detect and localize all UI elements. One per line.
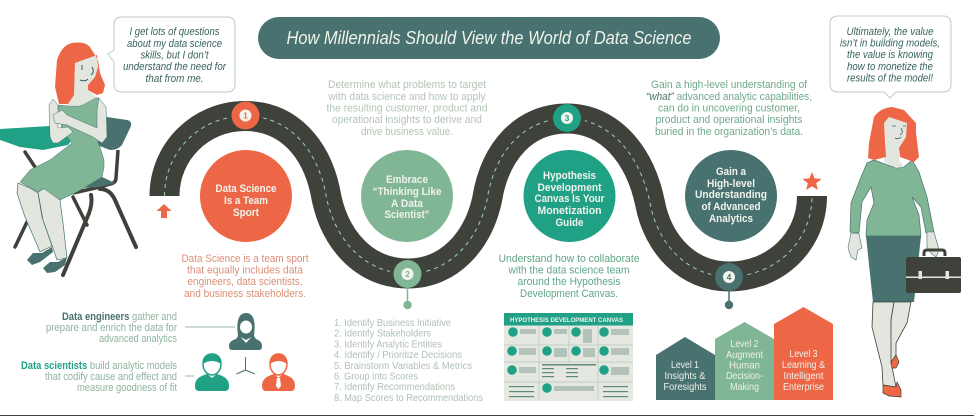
text: data engineers: prepare and enrich the data for	[46, 322, 177, 334]
text: understand how to collaborate: around the Hypothesis	[518, 276, 621, 288]
shoes	[27, 247, 67, 273]
circle: data science is a team sport	[200, 150, 292, 242]
text: gain a high-level understanding: “what” advanced analytic capabilities,	[646, 91, 812, 103]
text: data engineers: advanced analytics	[99, 333, 177, 345]
speech bubble: right: isn’t in building models,	[840, 38, 940, 50]
level 2 block: Decision-	[726, 370, 763, 382]
finish star	[802, 172, 822, 190]
numbered list of steps: 7. Identify Recommendations	[334, 381, 455, 393]
start arrow	[156, 204, 172, 218]
circle: data science is a team sport: Sport	[233, 207, 259, 219]
text: data scientists: measure goodness of fit	[77, 382, 177, 394]
circle: embrace thinking like a data scientist: Scientist”	[384, 209, 430, 221]
circle: hypothesis development canvas: Guide	[556, 217, 584, 229]
right figure: woman with briefcase	[848, 107, 961, 397]
circle: gain a high-level understanding: Gain a	[716, 166, 747, 178]
numbered list of steps: 8. Map Scores to Recommendations	[334, 392, 483, 404]
neck and face	[62, 55, 98, 105]
numbered list of steps: 3. Identify Analytic Entities	[334, 338, 442, 350]
text: gain a high-level understanding: can do in uncovering customer,	[658, 102, 800, 114]
numbered list of steps: 2. Identify Stakeholders	[334, 328, 431, 340]
level 2 block: Making	[730, 381, 759, 393]
speech bubble: right: the value is knowing	[847, 49, 934, 61]
speech bubble: left: I get lots of questions	[130, 26, 220, 38]
circle: gain a high-level understanding: Understanding	[695, 189, 767, 201]
hair	[55, 42, 105, 104]
text: data engineers	[46, 311, 177, 345]
circle: data science is a team sport: Is a Team	[224, 195, 268, 207]
text: gain a high-level understanding: buried in the organization’s data.	[655, 126, 803, 138]
icon: data scientist	[195, 354, 229, 391]
level 2 block: Human	[729, 360, 760, 372]
team icons	[185, 313, 295, 391]
text: gain a high-level understanding: Gain a high-level understanding of	[651, 79, 808, 91]
level 1 block: Level 1	[671, 359, 699, 371]
icon: business stakeholder	[262, 354, 295, 391]
text: determine what problems	[326, 79, 488, 138]
level 3 block: Level 3	[790, 348, 818, 360]
step marker 4: 4	[727, 272, 732, 282]
hands	[848, 232, 939, 260]
step marker 4	[715, 263, 743, 309]
text: determine what problems: operational insights to derive and	[332, 114, 482, 126]
speech bubble: left	[108, 17, 235, 92]
level 1 block: Insights &	[664, 370, 706, 382]
circle: hypothesis development canvas	[524, 150, 616, 242]
hair	[868, 107, 919, 162]
text: team sport description: Data Science is a team sport	[182, 253, 308, 265]
level 1 block: Foresights	[664, 381, 706, 393]
chair	[15, 117, 136, 275]
numbered list of steps: 4. Identify / Prioritize Decisions	[334, 349, 462, 361]
icon: data engineer	[229, 313, 262, 350]
speech bubble: left: about my data science	[127, 38, 222, 50]
text: understand how to collaborate: with the data science team	[508, 264, 630, 276]
circle: hypothesis development canvas: Development	[538, 182, 602, 194]
legs	[872, 302, 911, 387]
circle: embrace thinking like a data scientist: Embrace	[386, 174, 428, 186]
circle: embrace thinking like a data scientist: A Data	[391, 198, 424, 210]
numbered list of steps	[334, 317, 483, 404]
hypothesis development canvas thumbnail	[504, 313, 633, 401]
circle: hypothesis development canvas: Monetization	[538, 205, 602, 217]
text: determine what problems: Determine what problems to target	[328, 79, 486, 91]
sweater	[850, 160, 934, 236]
shoes	[883, 355, 901, 397]
briefcase	[906, 250, 961, 293]
icon: connector	[236, 357, 255, 374]
text: understand how to collaborate: Development Canvas.	[520, 288, 618, 300]
speech bubble: right: how to monetize the	[847, 61, 933, 73]
title banner: How Millennials Should View the World of Data Science	[286, 27, 692, 48]
numbered list of steps: 1. Identify Business Initiative	[334, 317, 451, 329]
bottom rule	[0, 415, 974, 416]
left figure: woman seated at desk	[0, 42, 136, 275]
text: data scientists: Data scientists build analytic models	[21, 360, 177, 372]
title banner	[258, 17, 720, 59]
circle: data science is a team sport: Data Science	[216, 183, 276, 195]
step marker 2: 2	[405, 269, 410, 279]
text: understand how to collaborate	[498, 253, 640, 300]
circle: gain a high-level understanding: High-level	[707, 178, 755, 190]
numbered list of steps: 5. Brainstorm Variables & Metrics	[334, 360, 472, 372]
text: data scientists: that codify cause and effect and	[45, 371, 177, 383]
step marker 3	[553, 104, 581, 132]
circle: embrace thinking like a data scientist: “Thinking Like	[372, 186, 442, 198]
skirt dots	[866, 236, 921, 302]
legs	[17, 183, 67, 260]
circle: gain a high-level understanding	[685, 150, 777, 242]
numbered list of steps: 6. Group into Scores	[334, 370, 418, 382]
speech bubble: left: skills, but I don’t	[140, 50, 209, 62]
circle: embrace thinking like a data scientist	[361, 150, 453, 242]
circle: hypothesis development canvas: Canvas Is Your	[534, 193, 605, 205]
circle: hypothesis development canvas: Hypothesis	[543, 170, 596, 182]
desk	[0, 126, 72, 150]
level 2 block	[715, 322, 774, 400]
step marker 1: 1	[243, 110, 248, 120]
facial features	[892, 126, 906, 139]
speech bubble: left: understand the need for	[123, 61, 227, 73]
circle: gain a high-level understanding: of Advanced	[702, 201, 760, 213]
text: gain a high-level understanding	[646, 79, 812, 138]
text: team sport description	[182, 253, 308, 300]
speech bubble: right	[830, 16, 951, 98]
level 3 block	[774, 307, 833, 400]
facial features	[80, 65, 93, 81]
text: understand how to collaborate: Understand how to collaborate	[498, 253, 640, 265]
level 3 block: Intelligent	[784, 370, 824, 382]
level 2 block: Level 2	[730, 338, 759, 350]
level 3 block: Learning &	[782, 359, 825, 371]
winding road	[164, 116, 812, 276]
hypothesis development canvas thumbnail: HYPOTHESIS DEVELOPMENT CANVAS	[510, 318, 623, 324]
speech bubble: left: that from me.	[146, 73, 204, 85]
text: data scientists	[21, 360, 177, 394]
level 1 block	[656, 337, 715, 400]
text: team sport description: and business stakeholders.	[184, 288, 306, 300]
text: gain a high-level understanding: product and operational insights	[656, 114, 803, 126]
text: determine what problems: drive business value.	[361, 126, 453, 138]
text: team sport description: that equally includes data	[187, 264, 304, 276]
speech bubble: right: results of the model!	[847, 72, 933, 84]
neck and face	[884, 117, 907, 168]
text: determine what problems: the resulting customer, product and	[326, 102, 488, 114]
step marker 1	[232, 102, 260, 130]
step marker 3: 3	[565, 113, 570, 123]
arms	[49, 98, 107, 143]
text: data engineers: Data engineers gather and	[62, 311, 177, 323]
text: team sport description: engineers, data scientists,	[188, 276, 302, 288]
text: determine what problems: with data science and how to apply	[328, 91, 486, 103]
level 2 block: Augment	[726, 349, 763, 361]
skirt	[866, 236, 921, 302]
speech bubble: right: Ultimately, the value	[846, 26, 934, 38]
step marker 2	[394, 260, 422, 309]
dress	[20, 98, 104, 200]
circle: gain a high-level understanding: Analytics	[709, 213, 753, 225]
level 3 block: Enterprise	[783, 381, 824, 393]
